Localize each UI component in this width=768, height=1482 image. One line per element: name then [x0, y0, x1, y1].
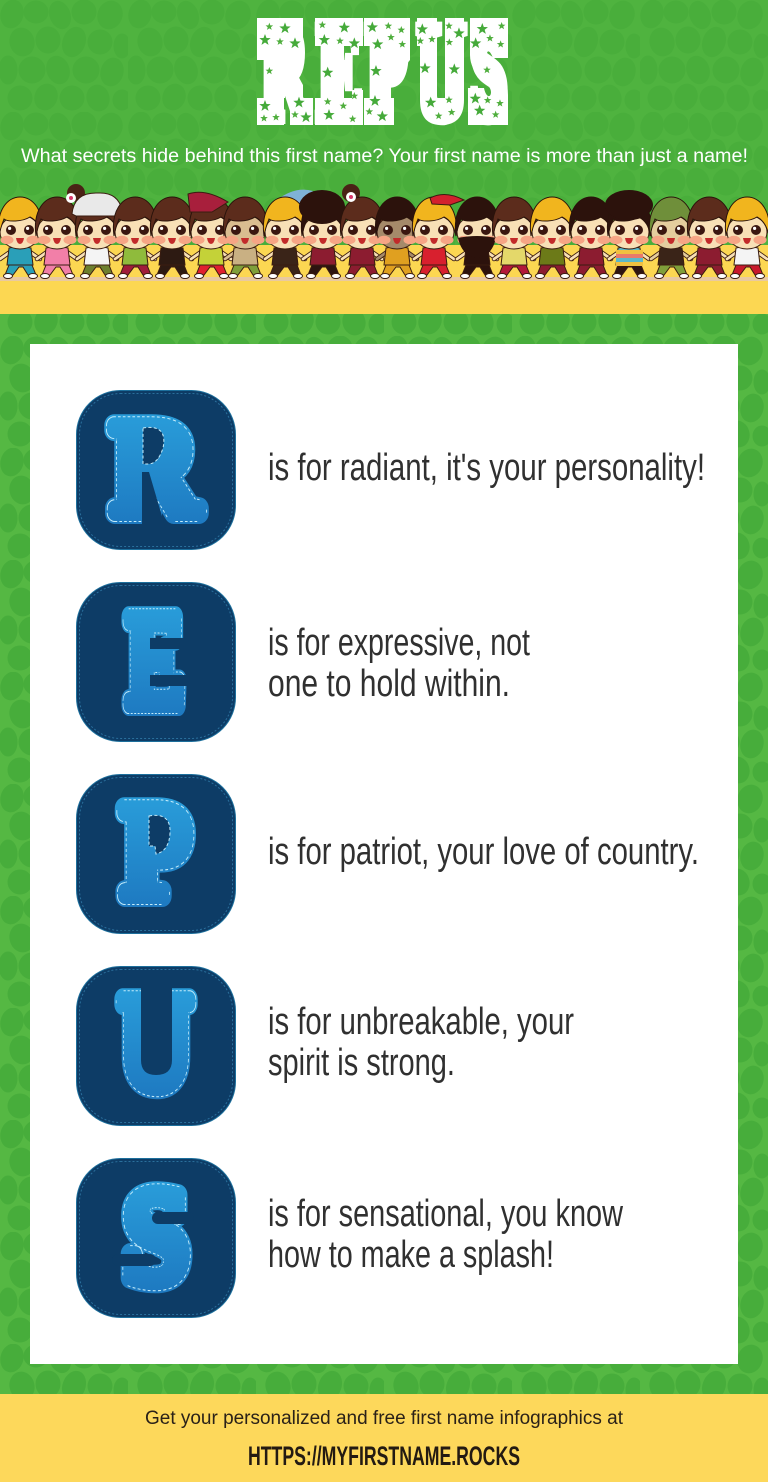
- row R: R: [112, 394, 199, 542]
- row U: spirit is strong.: [268, 1042, 455, 1084]
- row E: [76, 582, 530, 742]
- subtitle: What secrets hide behind this first name? Your first name is more than just a name!: [21, 146, 748, 167]
- row R: [76, 390, 705, 550]
- row U: [76, 966, 574, 1126]
- illustration: row of children holding hands: [0, 184, 768, 278]
- row U: U: [120, 968, 192, 1116]
- row P: P: [122, 777, 190, 925]
- row S: S: [124, 1162, 188, 1310]
- row U: U: [120, 968, 192, 1116]
- banner: yellow band: [0, 245, 768, 314]
- row P: P: [122, 777, 190, 925]
- header tint over background: [0, 0, 768, 245]
- row U: U: [120, 968, 192, 1116]
- row S: S: [124, 1162, 188, 1310]
- row S: S: [124, 1162, 188, 1310]
- footer: Get your personalized and free first name infographics at: [145, 1408, 624, 1429]
- row E: one to hold within.: [268, 663, 510, 705]
- panel: letter meanings: [30, 344, 738, 1364]
- row E: E: [127, 586, 184, 734]
- footer: HTTPS://MYFIRSTNAME.ROCKS: [248, 1441, 520, 1471]
- row R: R: [112, 394, 199, 542]
- row E: is for expressive, not: [268, 622, 530, 664]
- row U: is for unbreakable, your: [268, 1001, 574, 1043]
- row S: how to make a splash!: [268, 1234, 554, 1276]
- row R: R: [112, 394, 199, 542]
- row S: [76, 1158, 623, 1318]
- row P: [76, 774, 699, 934]
- row E: E: [127, 586, 184, 734]
- footer: [0, 1394, 768, 1482]
- row E: E: [127, 586, 184, 734]
- row S: is for sensational, you know: [268, 1193, 623, 1235]
- row P: P: [122, 777, 190, 925]
